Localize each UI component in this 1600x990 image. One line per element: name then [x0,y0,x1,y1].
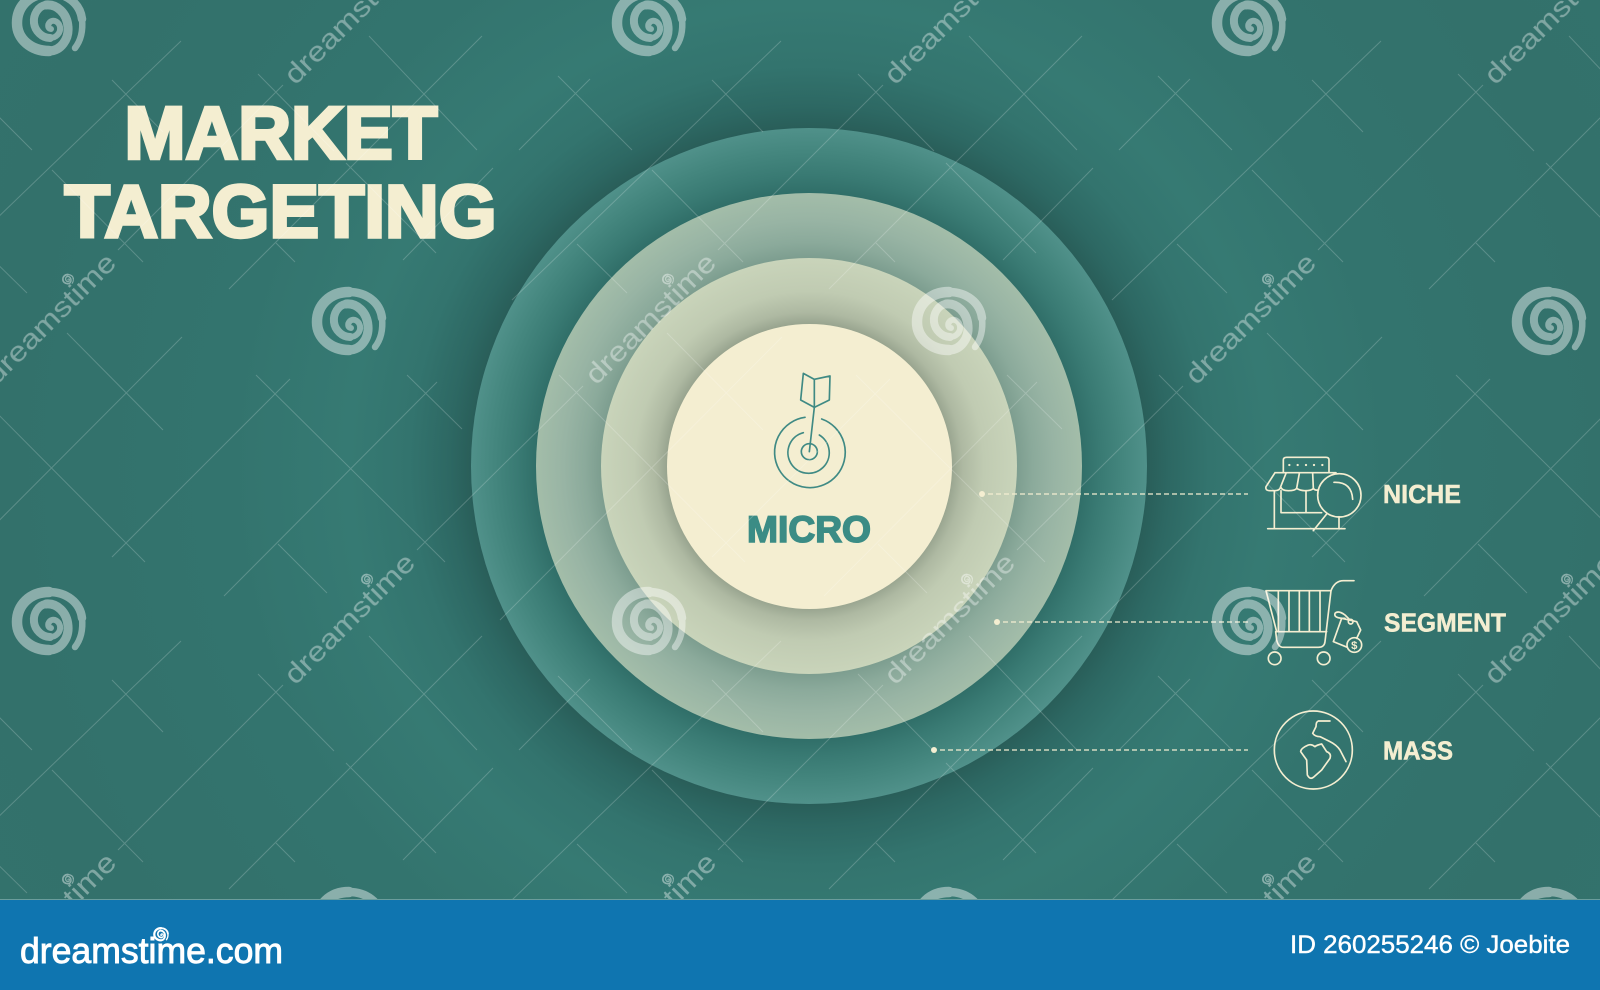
label: mass: MASS [1383,736,1453,766]
title: MARKET [124,92,438,174]
watermark text: time [1256,846,1322,912]
ring: niche [601,258,1017,674]
footer logo: dreamstime.com [20,930,283,971]
footer image id and credit: ID 260255246 © Joebite [1290,931,1570,959]
watermark text: dreamstime [579,247,722,390]
watermark text: dreamstime [278,547,421,690]
ring: segment [536,193,1082,739]
disc: micro [667,324,952,609]
watermark text: dreamstime [1478,547,1600,690]
footer bar [0,899,1600,990]
connector: niche [979,491,1248,497]
label: segment: SEGMENT [1384,608,1506,638]
icon: shopping cart with price tag [1266,581,1362,665]
icon: globe [1274,711,1352,789]
concentric market circles [471,128,1147,804]
ring: mass [471,128,1147,804]
icon: dart and target [775,373,845,488]
watermark text: dreamstime [878,547,1021,690]
title [64,92,496,253]
title: TARGETING [64,170,496,253]
icon: shopping cart with price tag: $ [1351,640,1358,652]
watermark text: time [656,846,722,912]
icon: storefront with magnifier [1266,457,1361,531]
label: niche: NICHE [1383,479,1461,509]
watermark text: dreamstime [1179,247,1322,390]
connector: mass [931,747,1248,753]
watermark text: time [56,846,122,912]
connector: segment [994,619,1248,625]
label: micro: MICRO [747,509,871,550]
